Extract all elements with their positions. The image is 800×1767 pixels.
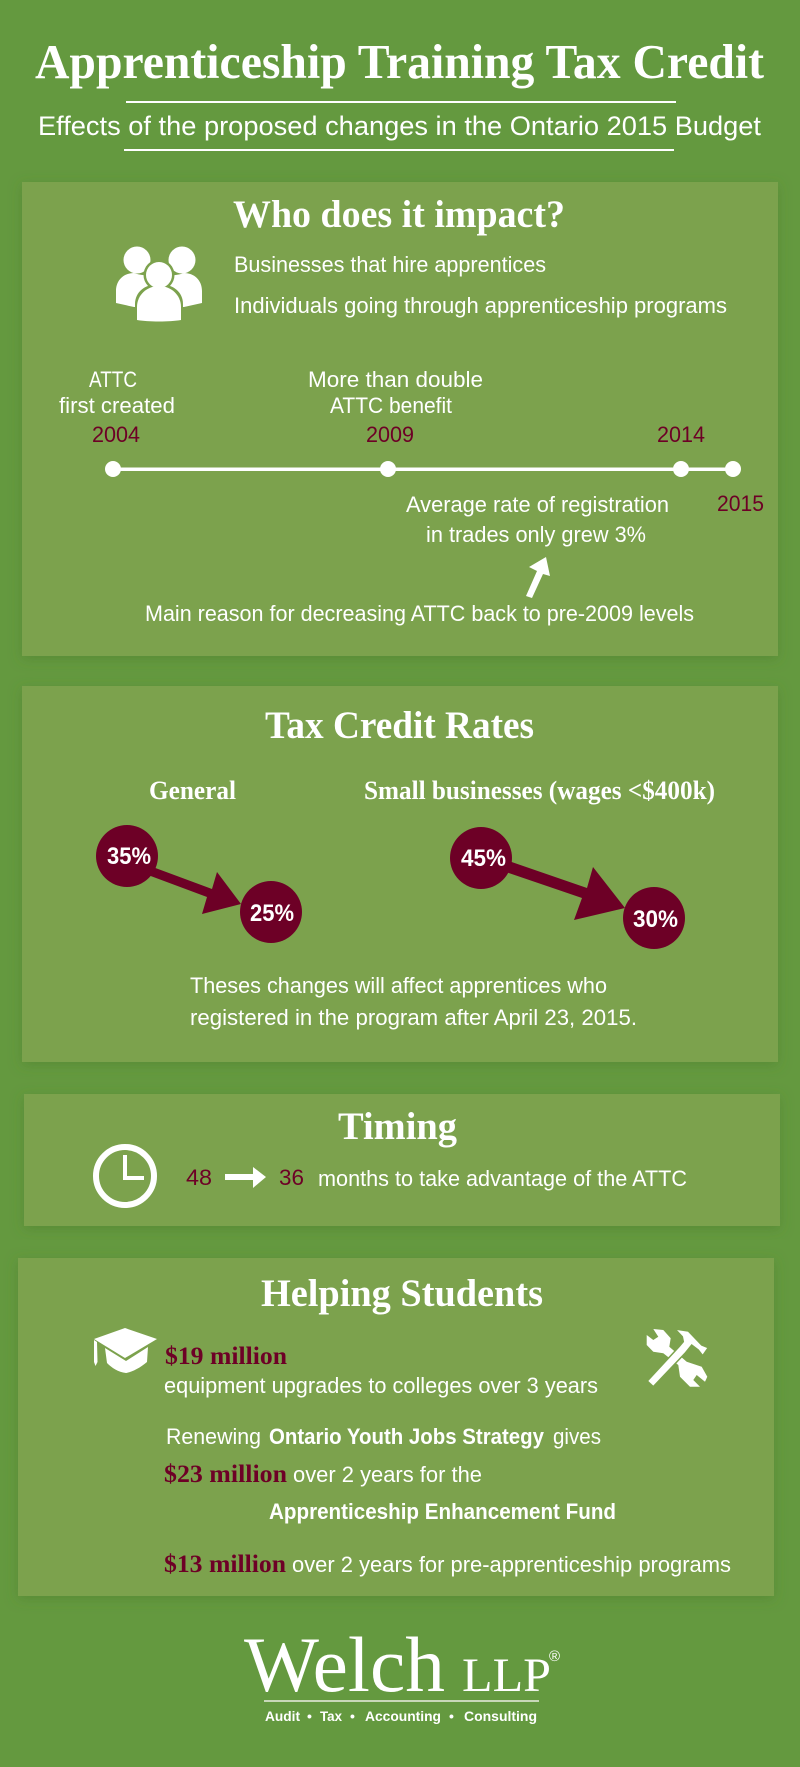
heading: timing: Timing bbox=[338, 1105, 457, 1148]
text: 23 million: $23 million bbox=[164, 1461, 287, 1488]
timeline: ATTC benefit bbox=[330, 393, 452, 418]
logo: Welch LLP: Welch bbox=[244, 1621, 445, 1708]
text: who is affected: registered in the program after April 23, 2015. bbox=[190, 1005, 637, 1030]
text: months: 36 bbox=[279, 1165, 304, 1190]
text: audience bbox=[234, 252, 727, 318]
text: 23 million: Apprenticeship Enhancement Fund bbox=[269, 1499, 616, 1524]
panel: tax credit rates bbox=[22, 686, 778, 1062]
text: registration growth bbox=[406, 492, 669, 547]
panel: helping students bbox=[18, 1258, 774, 1596]
text: 19 million bbox=[164, 1343, 598, 1398]
text: registration growth: Average rate of registration bbox=[406, 492, 669, 517]
text: 23 million bbox=[164, 1461, 616, 1524]
rate change: small businesses: 45% bbox=[461, 845, 506, 872]
title: Apprenticeship Training Tax Credit bbox=[35, 34, 765, 89]
timeline: 2014 bbox=[657, 422, 705, 447]
rate change: small businesses: 30% bbox=[633, 906, 678, 933]
icon: tools bbox=[647, 1329, 708, 1387]
rate change: small businesses bbox=[450, 827, 685, 949]
text: audience: Individuals going through apprenticeship programs bbox=[234, 293, 727, 318]
subtitle: Effects of the proposed changes in the Ontario 2015 Budget bbox=[38, 111, 761, 141]
heading: tax credit rates: Tax Credit Rates bbox=[265, 704, 534, 747]
text: 13 million: $13 million bbox=[164, 1551, 286, 1578]
logo: Welch LLP: • bbox=[449, 1708, 454, 1724]
text: months: months to take advantage of the ATTC bbox=[318, 1166, 687, 1191]
text: youth jobs strategy: Ontario Youth Jobs Strategy bbox=[269, 1424, 545, 1449]
timeline: More than double bbox=[308, 367, 483, 392]
text: who is affected: Theses changes will affect apprentices who bbox=[190, 973, 607, 998]
icon: people bbox=[116, 246, 202, 323]
panel: who does it impact bbox=[22, 182, 778, 656]
logo: Welch LLP bbox=[244, 1621, 560, 1724]
timeline: 2015 bbox=[717, 491, 764, 516]
logo: Welch LLP: LLP bbox=[462, 1649, 551, 1702]
rate change: general bbox=[96, 825, 302, 943]
subheading: small businesses: Small businesses (wages <$400k) bbox=[364, 776, 715, 805]
text: months: 48 bbox=[186, 1165, 212, 1190]
rate change: general: 25% bbox=[250, 900, 294, 927]
arrow: reason to registration bbox=[526, 557, 550, 598]
heading: helping students: Helping Students bbox=[261, 1272, 543, 1315]
logo: Welch LLP: Consulting bbox=[464, 1708, 537, 1724]
timeline: 2009 bbox=[366, 422, 414, 447]
logo: Welch LLP: Accounting bbox=[365, 1708, 441, 1724]
text: youth jobs strategy: Renewing bbox=[166, 1424, 261, 1449]
text: youth jobs strategy: gives bbox=[553, 1424, 601, 1449]
subheading: general: General bbox=[149, 776, 236, 805]
text: 19 million: $19 million bbox=[165, 1343, 287, 1370]
icon: graduation cap bbox=[94, 1328, 157, 1373]
text: 23 million: over 2 years for the bbox=[293, 1462, 482, 1487]
panel: timing bbox=[24, 1094, 780, 1226]
text: audience: Businesses that hire apprentices bbox=[234, 252, 546, 277]
text: registration growth: in trades only grew 3% bbox=[426, 522, 646, 547]
rate change: general: 35% bbox=[107, 843, 151, 870]
timeline: first created bbox=[59, 393, 175, 418]
icon: clock bbox=[96, 1147, 154, 1205]
text: who is affected bbox=[190, 973, 637, 1030]
logo: Welch LLP: • bbox=[350, 1708, 355, 1724]
timeline bbox=[59, 367, 764, 516]
logo: Welch LLP: • bbox=[307, 1708, 312, 1724]
text: 13 million: over 2 years for pre-apprenticeship programs bbox=[292, 1552, 731, 1577]
text: youth jobs strategy bbox=[166, 1424, 601, 1449]
heading: who does it impact: Who does it impact? bbox=[233, 193, 565, 236]
text: main reason: Main reason for decreasing ATTC back to pre-2009 levels bbox=[145, 601, 694, 626]
logo: Welch LLP: ® bbox=[549, 1648, 560, 1665]
logo: Welch LLP: Tax bbox=[320, 1708, 342, 1724]
timeline: ATTC bbox=[89, 367, 137, 392]
logo: Welch LLP: Audit bbox=[265, 1708, 300, 1724]
text: 19 million: equipment upgrades to colleges over 3 years bbox=[164, 1373, 598, 1398]
timeline: 2004 bbox=[92, 422, 140, 447]
